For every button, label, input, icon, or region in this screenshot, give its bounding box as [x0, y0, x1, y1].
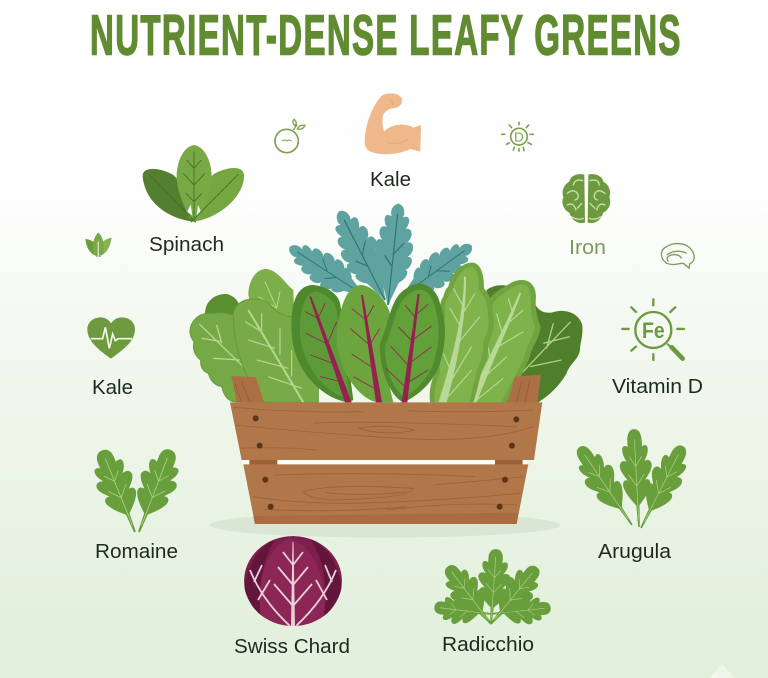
icon: vitamin D sun: [502, 122, 533, 151]
icon: romaine leaves: [84, 443, 188, 539]
icon: radicchio-labelled leaf spray: [433, 548, 552, 634]
icon: heart with pulse: [87, 317, 135, 359]
right lettuce leaf: [430, 263, 494, 402]
frond left: [323, 202, 402, 309]
title: NUTRIENT-DENSE LEAFY GREENS: [90, 3, 682, 67]
icon: radicchio head: [244, 536, 342, 626]
icon: spinach leaves: [143, 145, 244, 222]
chard leaf right: [380, 284, 445, 402]
wood grain: [233, 407, 533, 511]
right corner post: [507, 375, 541, 402]
left corner post: [231, 376, 264, 402]
icon: small fruit with sprout: [275, 119, 305, 153]
spinach centre leaf: [177, 145, 212, 218]
left lettuce leaf: [190, 313, 280, 402]
icon: arugula leaves: [566, 428, 697, 535]
chard leaf left: [291, 285, 353, 402]
frond centre: [369, 202, 418, 307]
label: Vitamin D: Vitamin D: [612, 376, 703, 398]
leafy greens cluster: [190, 263, 582, 402]
label: Spinach: Spinach: [149, 234, 224, 256]
icon: vitamin D sun: D: [514, 129, 524, 144]
dark back left leaf: [205, 294, 240, 333]
wooden crate: [210, 375, 560, 538]
crate nails: [253, 415, 519, 510]
spinach left leaf: [143, 169, 193, 222]
light back left leaf: [248, 269, 295, 340]
second right lettuce leaf: [470, 280, 541, 402]
frond far right: [392, 232, 481, 309]
label: Kale left: Kale: [92, 377, 133, 399]
icon: brain green: [562, 174, 610, 223]
second lettuce leaf: [233, 299, 318, 402]
gap behind planks: [243, 459, 527, 465]
dark right leaf: [487, 285, 582, 402]
icon: spinach small: [85, 232, 112, 258]
label: Iron: Iron: [569, 237, 606, 259]
icon: brain outline: [661, 244, 694, 268]
label: Arugula: Arugula: [598, 541, 672, 563]
chard leaf centre: [337, 285, 393, 402]
icon: iron magnifier: [622, 299, 684, 360]
icon: flexed muscle: [365, 93, 421, 154]
frond far left: [281, 233, 374, 310]
kale fronds: [281, 202, 481, 310]
label: Radicchio: Radicchio: [442, 634, 534, 656]
spinach right leaf: [193, 168, 244, 222]
top plank: [230, 402, 542, 460]
connector battens: [249, 458, 523, 467]
label: Swiss Chard: Swiss Chard: [234, 636, 350, 658]
bottom plank: [243, 464, 528, 524]
crate shadow: [210, 512, 560, 538]
icon: iron magnifier: Fe: [642, 318, 665, 343]
label: Romaine: Romaine: [95, 541, 178, 563]
label: Kale top: Kale: [370, 169, 411, 191]
